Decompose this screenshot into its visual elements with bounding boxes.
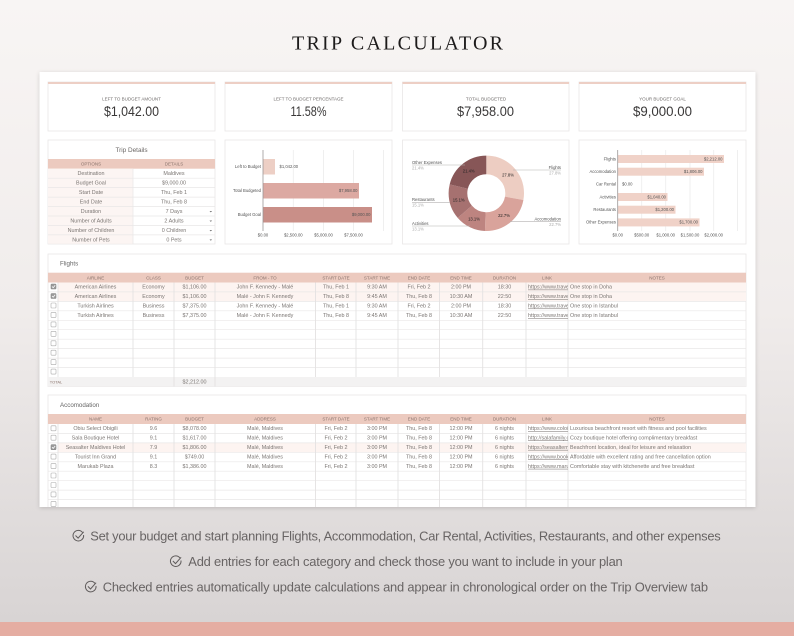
panel: flights table: Turkish Airlines: [77, 313, 114, 319]
panel: accommodation table: Obiu Select Obigili: [73, 426, 118, 432]
KPI card: your budget goal: $9,000.00: [633, 104, 692, 119]
donut chart: expenses by category: Other Expenses: [412, 160, 442, 165]
panel: flights table: Economy: [142, 294, 165, 300]
panel: flights table: 9:30 AM: [367, 285, 387, 291]
panel: accommodation table: http://salafamily.com: [528, 435, 577, 441]
bar chart: budget by category: Other Expenses: [586, 220, 616, 225]
panel: accommodation table: Tourist Inn Grand: [75, 454, 116, 460]
donut chart: expenses by category: Restaurants: [412, 197, 435, 202]
bar chart: budget by category: $2,212.00: [704, 156, 723, 162]
panel: accommodation table: RATING: [145, 417, 162, 422]
panel: accommodation table: [48, 395, 746, 520]
panel: flights table: DURATION: [493, 275, 516, 280]
heading: flights: Flights: [60, 260, 78, 268]
panel: trip details: 0 Pets: [166, 237, 182, 243]
bullet: checked entries: Checked entries automatically update calculations and appear in chronological order on the Trip Overview tab: [103, 580, 708, 594]
panel: flights table: 18:30: [498, 285, 511, 291]
bar chart: budget by category: Restaurants: [593, 207, 616, 212]
panel: flights table: 9:45 AM: [367, 294, 387, 300]
panel: accommodation table: Malé, Maldives: [247, 435, 283, 441]
panel: accommodation table: Fri, Feb 2: [324, 426, 348, 432]
panel: flights table: 2:00 PM: [451, 304, 472, 310]
bar chart: budget summary: Budget Goal: [238, 212, 261, 217]
panel: accommodation table: 6 nights: [495, 454, 514, 460]
panel: accommodation table: 6 nights: [495, 464, 514, 470]
panel: trip details: OPTIONS: [81, 162, 101, 167]
panel: flights table: 22:50: [498, 313, 511, 319]
bar chart: budget by category: Car Rental: [596, 182, 616, 187]
panel: flights table: Business: [143, 304, 165, 310]
panel: accommodation table: 9.1: [150, 435, 157, 441]
panel: accommodation table: Malé, Maldives: [247, 454, 283, 460]
donut chart: expenses by category: Accomodation: [534, 216, 562, 222]
panel: trip details: Thu, Feb 8: [161, 200, 187, 206]
panel: flights table: https://www.travel.com: [528, 313, 582, 319]
panel: flights table: CLASS: [146, 275, 161, 280]
panel: accommodation table: Thu, Feb 8: [406, 464, 432, 470]
panel: accommodation table: Beachfront location, ideal for leisure and relaxation: [570, 445, 691, 451]
panel: accommodation table: 7.9: [150, 445, 157, 451]
bar chart: budget summary: Total Budgeted: [233, 188, 262, 193]
panel: accommodation table: 3:00 PM: [367, 454, 388, 460]
panel: accommodation table: Fri, Feb 2: [324, 464, 348, 470]
KPI card: your budget goal: YOUR BUDGET GOAL: [639, 96, 686, 102]
donut chart: expenses by category: 22.7%: [549, 222, 561, 227]
panel: accommodation table: 9.6: [150, 426, 157, 432]
title: TRIP CALCULATOR: [292, 32, 504, 54]
panel: accommodation table: Malé, Maldives: [247, 426, 283, 432]
panel: flights table: Malé - John F. Kennedy: [237, 294, 294, 300]
panel: flights table: Thu, Feb 8: [406, 294, 432, 300]
donut chart: expenses by category: 13.1%: [412, 226, 424, 231]
panel: accommodation table: 12:00 PM: [449, 464, 473, 470]
panel: flights table: FROM - TO: [253, 275, 277, 280]
bar chart: budget by category: $1,040.00: [647, 194, 667, 199]
KPI card: left to budget percentage: [225, 82, 392, 131]
bar chart: budget by category: $0.00: [612, 232, 624, 238]
panel: accommodation table: https://www.coloi.com: [528, 426, 580, 432]
panel: trip details: End Date: [80, 200, 102, 206]
panel: flights table: START DATE: [322, 275, 350, 280]
icon: check circle: [170, 556, 181, 566]
panel: trip details: 7 Days: [166, 209, 183, 215]
panel: accommodation table: BUDGET: [185, 417, 204, 422]
panel: accommodation table: 12:00 PM: [449, 454, 473, 460]
panel: accommodation table: Fri, Feb 2: [324, 435, 348, 441]
heading: trip details: Trip Details: [115, 147, 148, 154]
panel: accommodation table: Sala Boutique Hotel: [72, 435, 119, 441]
panel: trip details: Destination: [78, 171, 104, 177]
panel: flights table: https://www.travel.com: [528, 294, 582, 300]
bar chart: budget by category: $0.00: [622, 182, 633, 187]
panel: accommodation table: 3:00 PM: [367, 464, 388, 470]
bar chart: budget by category: $2,000.00: [704, 232, 724, 238]
bar chart: budget by category: Accomodation: [589, 169, 617, 174]
panel: flights table: Thu, Feb 8: [323, 294, 349, 300]
panel: accommodation table: END DATE: [408, 417, 430, 422]
bar chart: budget summary: $9,000.00: [352, 212, 371, 217]
panel: trip details: Start Date: [79, 190, 103, 196]
KPI card: your budget goal: [579, 82, 746, 131]
panel: accommodation table: START DATE: [322, 417, 350, 422]
panel: accommodation table: Fri, Feb 2: [324, 454, 348, 460]
panel: accommodation table: 9.1: [150, 454, 157, 460]
KPI card: total budgeted: $7,958.00: [457, 104, 514, 119]
bullet: add entries: Add entries for each category and check those you want to include in your plan: [188, 554, 623, 569]
panel: trip details: [48, 140, 215, 244]
donut chart: expenses by category: 21.4%: [412, 166, 424, 170]
panel: flights table: $1,106.00: [183, 285, 206, 291]
panel: flights table: Thu, Feb 1: [323, 285, 349, 291]
bar chart: budget summary: Left to Budget: [235, 164, 262, 169]
panel: flights table: One stop in Doha: [570, 285, 612, 291]
panel: accommodation table: Thu, Feb 8: [406, 426, 432, 432]
panel: flights table: END TIME: [450, 275, 472, 280]
panel: accommodation table: Marukab Plaza: [78, 464, 113, 470]
donut chart: expenses by category: 21.4%: [463, 168, 475, 174]
panel: accommodation table: ADDRESS: [254, 417, 276, 422]
KPI card: left to budget percentage: 11.58%: [290, 104, 326, 119]
bar chart: budget summary: $2,500.00: [284, 232, 303, 238]
panel: trip details: DETAILS: [165, 162, 183, 167]
panel: accommodation table: 8.3: [150, 464, 157, 470]
panel: trip details: Thu, Feb 1: [161, 190, 187, 196]
panel: flights table: Fri, Feb 2: [407, 285, 431, 291]
panel: accommodation table: DURATION: [493, 417, 516, 422]
bar chart: budget by category: $1,500.00: [681, 232, 700, 238]
donut chart: expenses by category: [402, 140, 569, 244]
panel: flights table: $7,375.00: [183, 304, 206, 310]
panel: flights table: 10:30 AM: [450, 313, 473, 319]
panel: accommodation table: NOTES: [649, 417, 665, 422]
panel: flights table: TOTAL: [50, 380, 63, 384]
panel: accommodation table: https://seasalterm.com: [528, 445, 583, 451]
bottom stripe: [0, 622, 794, 636]
panel: flights table: 2:00 PM: [451, 285, 472, 291]
panel: accommodation table: Malé, Maldives: [247, 464, 283, 470]
panel: accommodation table: 3:00 PM: [367, 435, 388, 441]
bar chart: budget by category: $1,200.00: [655, 207, 675, 212]
panel: flights table: Thu, Feb 1: [323, 304, 349, 310]
panel: accommodation table: $749.00: [185, 454, 204, 460]
panel: accommodation table: $1,617.00: [183, 435, 206, 441]
KPI card: left to budget percentage: LEFT TO BUDGET PERCENTAGE: [273, 96, 344, 102]
panel: accommodation table: 12:00 PM: [449, 445, 473, 451]
panel: accommodation table: https://www.maru.com: [528, 464, 582, 470]
panel: flights table: Thu, Feb 8: [323, 313, 349, 319]
panel: flights table: END DATE: [408, 275, 430, 280]
donut chart: expenses by category: 13.1%: [468, 216, 480, 222]
heading: accommodation: Accomodation: [60, 402, 100, 409]
panel: accommodation table: NAME: [89, 417, 102, 422]
KPI card: total budgeted: TOTAL BUDGETED: [466, 96, 507, 102]
panel: accommodation table: 3:00 PM: [367, 426, 388, 432]
bar chart: budget by category: $1,700.00: [679, 220, 699, 225]
panel: flights table: https://www.travel.com: [528, 285, 582, 291]
panel: flights table: [48, 254, 746, 386]
panel: flights table: Business: [143, 313, 165, 319]
panel: flights table: American Airlines: [75, 285, 117, 291]
bar chart: budget by category: $1,806.00: [684, 169, 703, 174]
panel: flights table: AIRLINE: [87, 275, 104, 280]
icon: check circle: [85, 581, 96, 592]
donut chart: expenses by category: 27.8%: [549, 170, 561, 176]
panel: flights table: Economy: [142, 285, 165, 291]
panel: accommodation table: $1,806.00: [183, 445, 206, 451]
panel: accommodation table: Fri, Feb 2: [324, 445, 348, 451]
bullet: set your budget: Set your budget and start planning Flights, Accommodation, Car Rental, Activities, Restaurants, and other expenses: [90, 528, 721, 544]
panel: flights table: 22:50: [498, 294, 511, 300]
panel: trip details: 0 Children: [162, 228, 186, 234]
panel: flights table: 9:30 AM: [367, 304, 387, 310]
panel: accommodation table: Seasalter Maldives Hotel: [66, 445, 125, 451]
KPI card: left to budget amount: $1,042.00: [104, 104, 159, 119]
panel: flights table: 18:30: [498, 304, 511, 310]
bar chart: budget summary: $7,958.00: [339, 188, 358, 193]
panel: trip details: $9,000.00: [162, 181, 186, 187]
panel: accommodation table: END TIME: [450, 417, 472, 422]
panel: trip details: Budget Goal: [76, 181, 106, 187]
KPI card: left to budget amount: LEFT TO BUDGET AMOUNT: [102, 96, 161, 102]
panel: flights table: 10:30 AM: [450, 294, 473, 300]
panel: trip details: 2 Adults: [164, 218, 184, 224]
panel: accommodation table: 12:00 PM: [449, 426, 473, 432]
bar chart: budget by category: $1,000.00: [656, 232, 676, 238]
panel: trip details: Number of Adults: [70, 218, 112, 224]
panel: accommodation table: Thu, Feb 8: [406, 454, 432, 460]
bar chart: budget summary: $7,500.00: [344, 232, 363, 238]
panel: accommodation table: 6 nights: [495, 426, 514, 432]
KPI card: total budgeted: [402, 82, 569, 131]
panel: accommodation table: Malé, Maldives: [247, 445, 283, 451]
spreadsheet sheet: [40, 72, 756, 507]
panel: flights table: John F. Kennedy - Malé: [237, 304, 293, 310]
donut chart: expenses by category: 27.8%: [502, 172, 514, 178]
panel: accommodation table: Thu, Feb 8: [406, 445, 432, 451]
KPI card: left to budget amount: [48, 82, 215, 131]
panel: flights table: Malé - John F. Kennedy: [237, 313, 294, 319]
panel: flights table: START TIME: [364, 275, 390, 280]
bar chart: budget by category: [579, 140, 746, 244]
donut chart: expenses by category: 15.1%: [453, 198, 465, 202]
panel: accommodation table: 12:00 PM: [449, 435, 473, 441]
panel: flights table: American Airlines: [75, 294, 117, 300]
icon: check circle: [73, 530, 84, 541]
donut chart: expenses by category: Activities: [412, 221, 429, 226]
panel: flights table: $1,106.00: [183, 294, 206, 300]
panel: accommodation table: $1,386.00: [183, 464, 206, 470]
panel: flights table: BUDGET: [185, 275, 204, 280]
bar chart: budget summary: [225, 140, 392, 244]
bar chart: budget summary: $0.00: [258, 232, 269, 238]
panel: flights table: Turkish Airlines: [77, 304, 114, 310]
panel: flights table: https://www.travel.com: [528, 304, 582, 310]
donut chart: expenses by category: Flights: [549, 165, 561, 170]
bar chart: budget by category: $500.00: [634, 232, 650, 238]
panel: trip details: Duration: [81, 209, 101, 215]
panel: flights table: Fri, Feb 2: [407, 304, 431, 310]
panel: accommodation table: Cozy boutique hotel offering complimentary breakfast: [570, 435, 698, 441]
panel: accommodation table: 3:00 PM: [367, 445, 388, 451]
panel: accommodation table: START TIME: [364, 417, 390, 422]
bar chart: budget summary: $5,000.00: [314, 232, 333, 238]
panel: flights table: Thu, Feb 8: [406, 313, 432, 319]
panel: flights table: $2,212.00: [183, 380, 206, 386]
panel: trip details: Maldives: [163, 171, 185, 177]
donut chart: expenses by category: 15.1%: [412, 202, 424, 208]
donut chart: expenses by category: 22.7%: [498, 213, 510, 218]
panel: accommodation table: Luxurious beachfront resort with fitness and pool facilities: [570, 426, 707, 432]
panel: accommodation table: https://www.booking: [528, 454, 576, 460]
panel: flights table: One stop in Istanbul: [570, 304, 618, 310]
panel: flights table: 9:45 AM: [367, 313, 387, 319]
panel: trip details: Number of Pets: [72, 237, 110, 243]
panel: accommodation table: 6 nights: [495, 445, 514, 451]
panel: flights table: $7,375.00: [183, 313, 206, 319]
panel: accommodation table: Affordable with excellent rating and free cancellation option: [570, 454, 711, 460]
bar chart: budget by category: Flights: [604, 156, 616, 162]
panel: accommodation table: $8,078.00: [183, 426, 206, 432]
panel: flights table: NOTES: [649, 275, 665, 280]
panel: accommodation table: 6 nights: [495, 435, 514, 441]
panel: flights table: John F. Kennedy - Malé: [237, 285, 293, 291]
panel: trip details: Number of Children: [68, 228, 114, 234]
panel: flights table: LINK: [542, 275, 552, 280]
bar chart: budget summary: $1,042.00: [280, 164, 299, 169]
panel: accommodation table: Comfortable stay with kitchenette and free breakfast: [570, 464, 695, 470]
panel: flights table: One stop in Istanbul: [570, 313, 618, 319]
bar chart: budget by category: Activities: [599, 194, 616, 199]
panel: accommodation table: LINK: [542, 417, 552, 422]
panel: flights table: One stop in Doha: [570, 294, 612, 300]
panel: accommodation table: Thu, Feb 8: [406, 435, 432, 441]
